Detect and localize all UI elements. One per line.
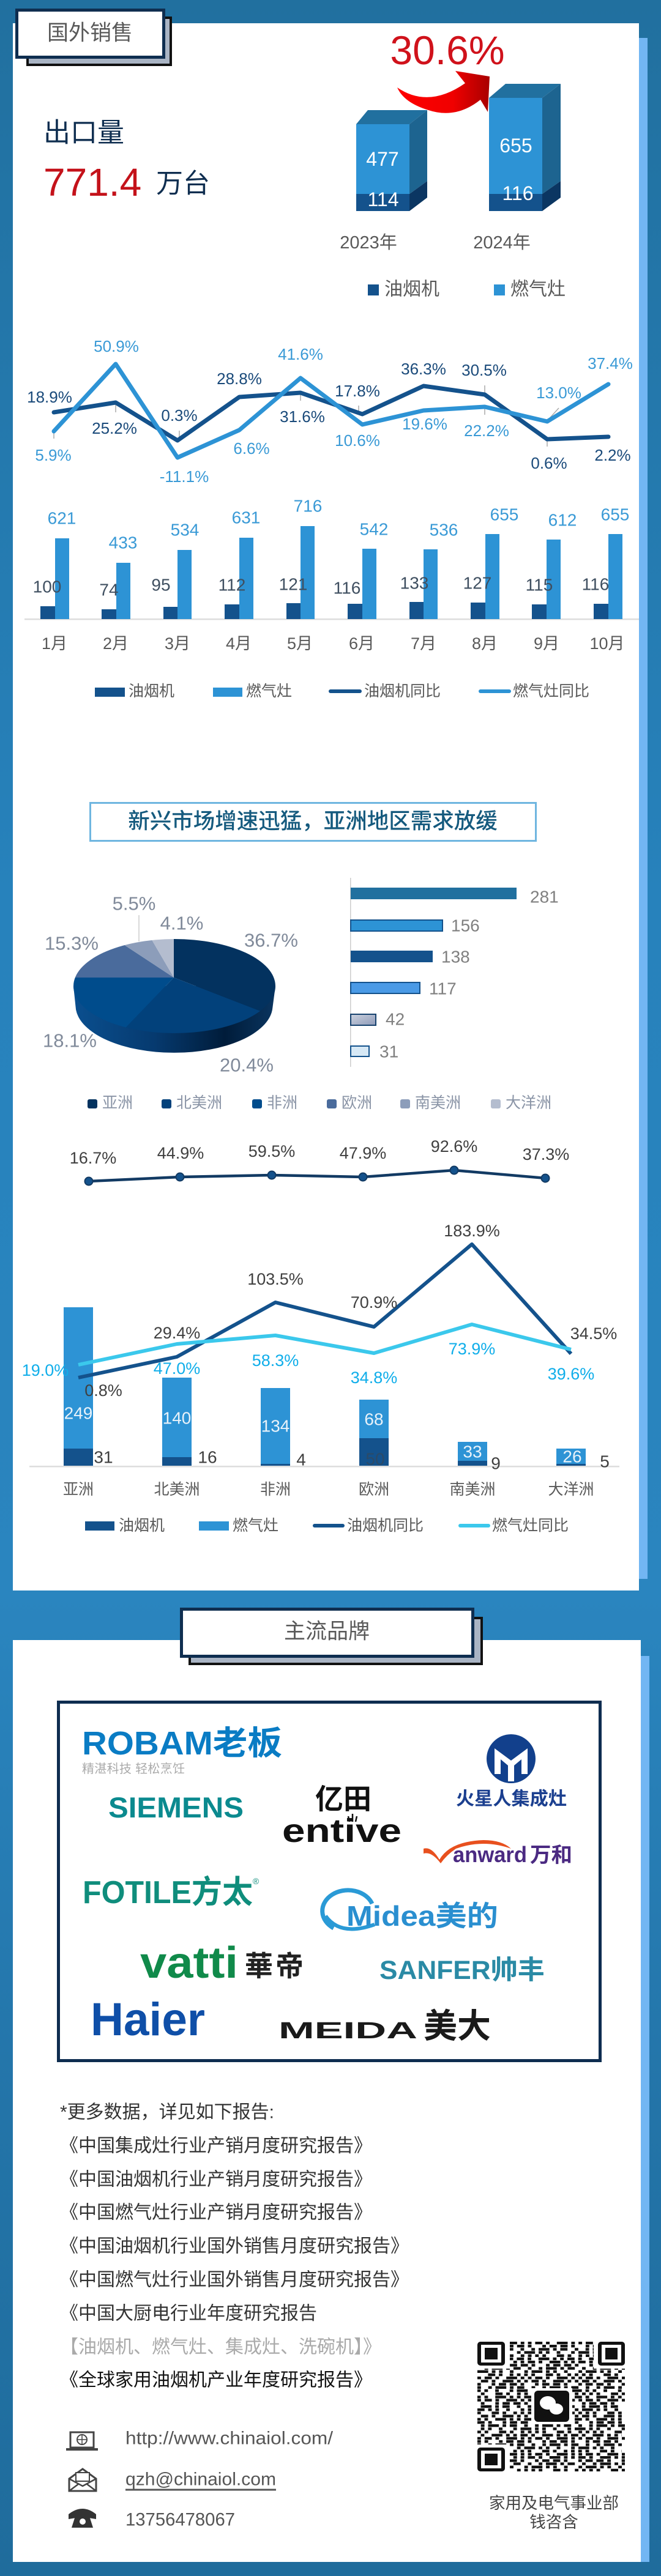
- logo: SIEMENS: SIEMENS: [108, 1791, 244, 1824]
- chart: regional year-on-year lines: 34.5%: [570, 1324, 617, 1343]
- logo: vatti: vatti: [140, 1939, 238, 1988]
- chart: stacked bars by region: 北美洲: [154, 1481, 200, 1498]
- text block: report list: 《中国燃气灶行业国外销售月度研究报告》: [60, 2270, 409, 2290]
- contact: website: http://www.chinaiol.com/: [125, 2429, 334, 2448]
- legend: regions: 亚洲: [102, 1094, 133, 1112]
- logo: entive: [282, 1783, 401, 1849]
- logo: 火星人集成灶: [456, 1734, 567, 1810]
- chart: horizontal bars by region: 31: [379, 1042, 398, 1061]
- chart: stacked bars by region: 33: [463, 1442, 482, 1461]
- 3D bar 2023: 477: [366, 148, 399, 170]
- chart: regional year-on-year lines: 29.4%: [154, 1324, 200, 1342]
- chart: monthly year-on-year lines: 30.5%: [461, 361, 507, 379]
- heading: 国外销售: [17, 10, 171, 65]
- chart: regional year-on-year lines: 103.5%: [247, 1270, 304, 1288]
- chart: stacked bars by region: 9: [491, 1453, 501, 1473]
- chart: dotted line share by region: 47.9%: [340, 1144, 386, 1162]
- logo: vatti: 華帝: [245, 1950, 304, 1982]
- chart: stacked bars by region: 26: [562, 1447, 582, 1466]
- legend: regions: [88, 1094, 551, 1112]
- logo: Midea: Midea美的: [346, 1900, 498, 1932]
- logo: MEIDA: MEIDA: [278, 2018, 417, 2044]
- chart: monthly year-on-year lines: 31.6%: [280, 407, 325, 426]
- text block: report list: 《中国油烟机行业国外销售月度研究报告》: [60, 2236, 409, 2256]
- chart: dotted line share by region: 37.3%: [523, 1145, 569, 1164]
- chart: stacked bars by region: 欧洲: [359, 1481, 389, 1498]
- heading: 主流品牌: [181, 1609, 482, 1664]
- legend: regional chart: 燃气灶同比: [492, 1517, 569, 1534]
- legend: monthly chart: 燃气灶同比: [513, 683, 589, 700]
- legend: monthly chart: [95, 683, 589, 700]
- chart: 3D pie by region: 36.7%: [244, 930, 298, 951]
- chart: monthly year-on-year lines: 25.2%: [92, 419, 137, 437]
- logo: entive: 亿田: [315, 1783, 372, 1815]
- subheading: emerging markets: [91, 803, 536, 841]
- logo: 火星人集成灶: 火星人集成灶: [456, 1789, 567, 1810]
- chart: horizontal bars by region: 117: [429, 979, 457, 998]
- chart: stacked bars by region: 134: [261, 1417, 289, 1435]
- text block: report list: [60, 2102, 409, 2391]
- chart: monthly bars: 116: [334, 579, 360, 597]
- chart: stacked bars by region: 68: [364, 1409, 384, 1429]
- 3D bar 2023: [340, 110, 427, 253]
- chart: monthly year-on-year lines: 19.6%: [402, 415, 447, 433]
- legend: monthly chart: 油烟机: [129, 683, 174, 700]
- icon: red growth arrow: [397, 71, 490, 113]
- 3D bar 2024: [473, 84, 561, 253]
- heading: 国外销售: 国外销售: [47, 21, 133, 45]
- text block: report list: *更多数据，详见如下报告:: [60, 2102, 274, 2123]
- QR code: [477, 2342, 625, 2471]
- legend: monthly chart: 燃气灶: [246, 683, 292, 700]
- stat: export volume: [43, 117, 210, 204]
- legend: regional chart: 油烟机: [119, 1517, 165, 1534]
- chart: horizontal bars by region: 42: [386, 1009, 405, 1029]
- chart: monthly year-on-year lines: 36.3%: [401, 360, 446, 378]
- chart: monthly bars: 536: [430, 520, 458, 540]
- stat: export volume: 出口量: [43, 117, 124, 148]
- chart: monthly year-on-year lines: 17.8%: [335, 382, 380, 400]
- growth rate 30.6%: 30.6%: [390, 28, 505, 73]
- chart: horizontal bars by region: 156: [451, 916, 480, 935]
- chart: monthly bars: 1月: [42, 634, 67, 653]
- chart: monthly bars: 133: [400, 574, 428, 592]
- chart: 3D pie by region: 20.4%: [220, 1055, 274, 1075]
- chart: monthly year-on-year lines: [27, 337, 633, 486]
- chart: monthly year-on-year lines: 5.9%: [35, 446, 72, 464]
- chart: regional year-on-year lines: 0.8%: [84, 1381, 122, 1400]
- chart: dotted line share by region: 92.6%: [431, 1137, 477, 1156]
- chart: monthly bars: 10月: [589, 634, 625, 653]
- chart: monthly year-on-year lines: 18.9%: [27, 388, 72, 406]
- chart: monthly bars: 7月: [411, 634, 436, 653]
- subheading: emerging markets: 新兴市场增速迅猛，亚洲地区需求放缓: [128, 809, 498, 833]
- chart: stacked bars by region: 4: [296, 1450, 306, 1469]
- chart: horizontal bars by region: 281: [530, 887, 559, 907]
- chart: monthly bars: 121: [279, 575, 307, 593]
- chart: 3D pie by region: 5.5%: [113, 893, 155, 914]
- chart: monthly bars: 3月: [165, 634, 190, 653]
- chart: stacked bars by region: 16: [198, 1447, 217, 1467]
- chart: dotted line share by region: 44.9%: [157, 1144, 204, 1162]
- legend: regional chart: 燃气灶: [233, 1517, 278, 1534]
- contact: phone: 13756478067: [125, 2509, 235, 2530]
- chart: monthly year-on-year lines: 28.8%: [217, 369, 262, 388]
- 3D bar 2023: 114: [367, 188, 399, 210]
- logo: MEIDA: [278, 2007, 491, 2045]
- legend: monthly chart: 油烟机同比: [364, 683, 441, 700]
- text block: report list: 《中国大厨电行业年度研究报告: [60, 2304, 317, 2323]
- chart: stacked bars by region: 非洲: [260, 1481, 291, 1498]
- chart: monthly bars: [24, 497, 639, 653]
- chart: monthly bars: 116: [582, 575, 609, 593]
- stat: export volume: 万台: [156, 169, 210, 198]
- chart: monthly bars: 9月: [534, 634, 559, 653]
- chart: stacked bars by region: 140: [163, 1408, 191, 1428]
- text block: report list: 《中国集成灶行业产销月度研究报告》: [60, 2136, 372, 2156]
- logo: FOTILE: ®: [253, 1876, 260, 1886]
- panel: brand logos: [59, 1702, 600, 2060]
- chart: monthly year-on-year lines: 6.6%: [233, 439, 270, 458]
- chart: monthly bars: 127: [463, 574, 491, 592]
- logo: ROBAM: ROBAM老板: [82, 1725, 282, 1762]
- logo: Vanward: 万和: [530, 1844, 572, 1867]
- 3D bar 2023: 2023年: [340, 232, 397, 253]
- logo: entive: entive: [282, 1813, 401, 1849]
- chart: monthly bars: 100: [33, 577, 61, 596]
- panel: overseas sales: [13, 23, 648, 1591]
- logo: ROBAM: 精湛科技 轻松烹饪: [82, 1762, 185, 1776]
- logo: SANFER: SANFER帅丰: [379, 1956, 545, 1985]
- chart: regional year-on-year lines: 47.0%: [154, 1359, 200, 1378]
- contact: email: [69, 2469, 276, 2491]
- logo: vatti: [140, 1939, 304, 1988]
- logo: FOTILE: FOTILE方太: [83, 1875, 253, 1910]
- chart: horizontal bars by region: 138: [441, 947, 470, 967]
- chart: stacked bars by region: 亚洲: [63, 1481, 94, 1498]
- logo: Vanward: [424, 1840, 572, 1867]
- chart: monthly bars: 6月: [349, 634, 375, 653]
- legend: annual chart: [368, 279, 566, 300]
- chart: monthly year-on-year lines: 50.9%: [94, 337, 139, 355]
- chart: monthly bars: 716: [294, 497, 322, 515]
- chart: monthly bars: 5月: [287, 634, 313, 653]
- legend: annual chart: 油烟机: [384, 279, 439, 300]
- contact: email: qzh@chinaiol.com: [125, 2469, 276, 2490]
- stat: export volume: 771.4: [43, 160, 141, 204]
- logo: Haier: Haier: [91, 1994, 205, 2046]
- chart: monthly bars: 74: [99, 580, 119, 599]
- chart: monthly bars: 95: [151, 575, 171, 595]
- logo: MEIDA: 美大: [424, 2007, 491, 2045]
- chart: monthly bars: 2月: [103, 634, 129, 653]
- chart: monthly year-on-year lines: -11.1%: [160, 467, 209, 486]
- 3D bar 2024: 2024年: [473, 232, 531, 253]
- legend: regional chart: 油烟机同比: [347, 1517, 424, 1534]
- chart: regional year-on-year lines: 19.0%: [22, 1361, 69, 1379]
- text block: report list: 【油烟机、燃气灶、集成灶、洗碗机】》: [60, 2337, 381, 2358]
- chart: monthly bars: 433: [109, 533, 137, 552]
- chart: 3D pie by region: 18.1%: [43, 1030, 97, 1051]
- chart: dotted line share by region: 16.7%: [70, 1149, 116, 1167]
- chart: stacked bars by region: 大洋洲: [548, 1481, 594, 1498]
- chart: monthly bars: 542: [360, 520, 388, 538]
- chart: 3D pie by region: 4.1%: [160, 913, 203, 934]
- legend: regional chart: [85, 1517, 569, 1534]
- chart: stacked bars by region: 31: [94, 1447, 113, 1467]
- chart: monthly bars: 631: [232, 508, 260, 527]
- chart: monthly year-on-year lines: 10.6%: [335, 431, 380, 450]
- chart: regional year-on-year lines: 39.6%: [548, 1365, 594, 1383]
- chart: monthly bars: 612: [548, 510, 577, 530]
- logo: ROBAM: [82, 1725, 282, 1776]
- chart: stacked bars by region: 5: [600, 1452, 610, 1471]
- chart: regional year-on-year lines: 58.3%: [252, 1351, 299, 1370]
- logo: Vanward: anward: [453, 1842, 527, 1867]
- legend: regions: 大洋洲: [506, 1094, 551, 1112]
- chart: regional year-on-year lines: 70.9%: [351, 1293, 397, 1312]
- chart: monthly bars: 8月: [472, 634, 498, 653]
- logo: Midea: [323, 1890, 498, 1932]
- text block: report list: 《全球家用油烟机产业年度研究报告》: [60, 2370, 372, 2391]
- legend: regions: 欧洲: [342, 1094, 372, 1112]
- legend: annual chart: 燃气灶: [510, 279, 566, 300]
- chart: monthly year-on-year lines: 0.3%: [161, 406, 198, 425]
- panel: brands and reports: [13, 1640, 649, 2562]
- text block: report list: 《中国燃气灶行业产销月度研究报告》: [60, 2202, 372, 2223]
- chart: monthly bars: 621: [48, 509, 76, 527]
- chart: stacked bars by region: 50: [365, 1450, 385, 1468]
- chart: dotted line share by region: [70, 1137, 569, 1186]
- text: QR caption: 家用及电气事业部: [489, 2494, 619, 2512]
- legend: regions: 北美洲: [176, 1094, 222, 1112]
- chart: monthly year-on-year lines: 2.2%: [594, 446, 631, 464]
- chart: monthly bars: 112: [218, 575, 245, 595]
- chart: monthly year-on-year lines: 13.0%: [536, 384, 581, 402]
- legend: regions: 南美洲: [415, 1094, 461, 1112]
- contact: website: [66, 2429, 334, 2451]
- chart: stacked bars by region: [29, 1307, 619, 1498]
- chart: monthly bars: 4月: [226, 634, 252, 653]
- chart: dotted line share by region: 59.5%: [248, 1142, 295, 1160]
- chart: monthly year-on-year lines: 41.6%: [278, 345, 323, 363]
- chart: monthly year-on-year lines: 0.6%: [531, 454, 567, 472]
- text block: report list: 《中国油烟机行业产销月度研究报告》: [60, 2169, 372, 2190]
- text: QR caption: 钱咨含: [529, 2513, 578, 2531]
- chart: stacked bars by region: 249: [64, 1403, 92, 1423]
- contact: phone: [69, 2509, 235, 2530]
- chart: monthly bars: 655: [490, 505, 518, 524]
- chart: 3D pie by region: [43, 893, 298, 1075]
- chart: 3D pie by region: 15.3%: [45, 932, 99, 954]
- chart: monthly bars: 115: [526, 575, 553, 595]
- chart: monthly year-on-year lines: 37.4%: [588, 354, 633, 373]
- heading: 主流品牌: 主流品牌: [284, 1620, 370, 1643]
- chart: regional year-on-year lines: [22, 1222, 617, 1400]
- chart: regional year-on-year lines: 183.9%: [444, 1222, 500, 1240]
- legend: regions: 非洲: [267, 1094, 297, 1112]
- 3D bar 2024: 655: [499, 135, 532, 157]
- chart: regional year-on-year lines: 34.8%: [351, 1368, 397, 1387]
- chart: regional year-on-year lines: 73.9%: [449, 1340, 495, 1358]
- chart: monthly bars: 655: [601, 505, 629, 524]
- chart: monthly bars: 534: [171, 520, 199, 540]
- 3D bar 2024: 116: [502, 182, 534, 204]
- chart: monthly year-on-year lines: 22.2%: [464, 421, 509, 440]
- text: QR caption: [489, 2494, 619, 2531]
- chart: horizontal bars by region: [350, 878, 559, 1067]
- chart: stacked bars by region: 南美洲: [449, 1481, 496, 1498]
